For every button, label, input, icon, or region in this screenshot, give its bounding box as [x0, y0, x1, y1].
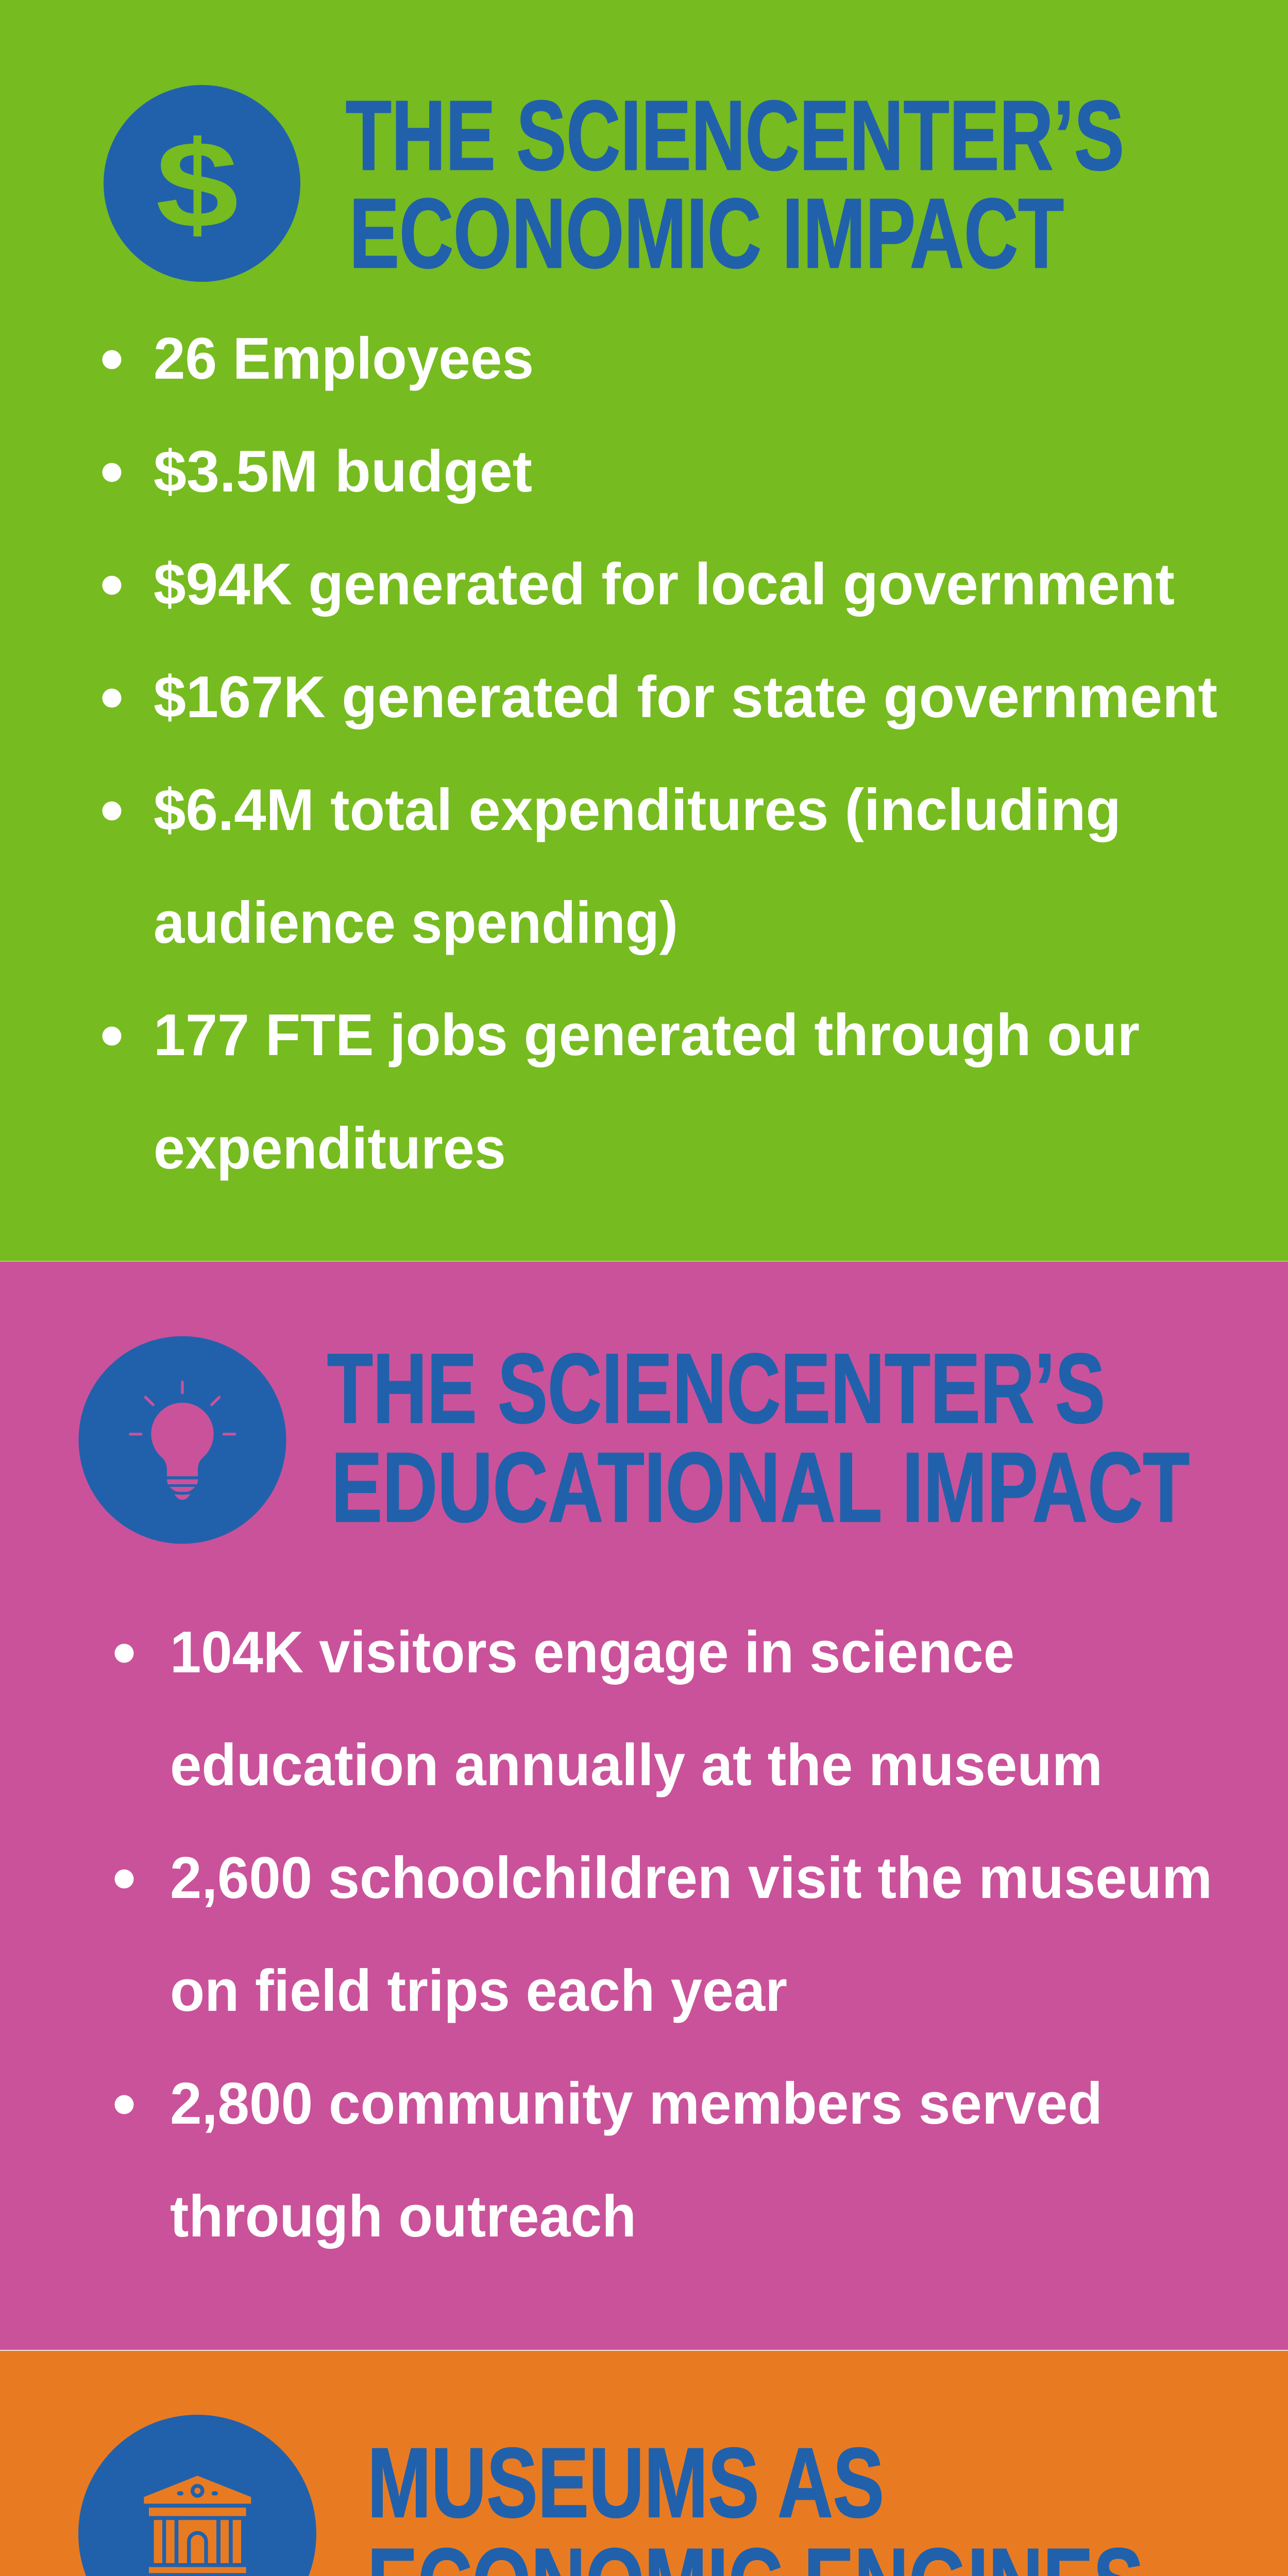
list: educational impact facts [114, 1620, 1212, 2249]
list: economic impact facts: $94K generated for local government [154, 552, 1175, 617]
panel: educational impact [0, 1261, 1288, 2350]
heading: the sciencenter's educational impact [327, 1333, 1190, 1543]
list: economic impact facts: 177 FTE jobs generated through our [154, 1003, 1140, 1068]
heading: the sciencenter's economic impact [346, 80, 1124, 289]
list: educational impact facts: through outreach [170, 2184, 636, 2249]
heading: the sciencenter's economic impact: ECONOMIC IMPACT [349, 178, 1064, 289]
list: economic impact facts: $167K generated for state government [154, 665, 1217, 730]
icon: light bulb [78, 1336, 286, 1544]
panel: museums as economic engines [0, 2350, 1288, 2576]
list: economic impact facts: $6.4M total expenditures (including [154, 777, 1121, 843]
list: economic impact facts: expenditures [154, 1116, 506, 1181]
list: educational impact facts: education annually at the museum [170, 1733, 1103, 1798]
list: economic impact facts [102, 326, 1217, 1181]
list: educational impact facts: 2,600 schoolchildren visit the museum [170, 1845, 1212, 1911]
panel: economic impact [0, 0, 1288, 1262]
list: economic impact facts: audience spending) [154, 890, 678, 956]
list: educational impact facts: 2,800 community members served [170, 2071, 1103, 2137]
icon: dollar sign: $ [156, 115, 239, 253]
icon: museum building [78, 2415, 316, 2576]
heading: museums as economic engines: MUSEUMS AS [367, 2427, 884, 2538]
list: educational impact facts: 104K visitors engage in science [170, 1620, 1014, 1685]
heading: museums as economic engines [367, 2427, 1144, 2576]
list: economic impact facts: $3.5M budget [154, 439, 532, 504]
list: economic impact facts: 26 Employees [154, 326, 534, 392]
list: educational impact facts: on field trips each year [170, 1958, 787, 2024]
icon: dollar sign [104, 85, 300, 282]
